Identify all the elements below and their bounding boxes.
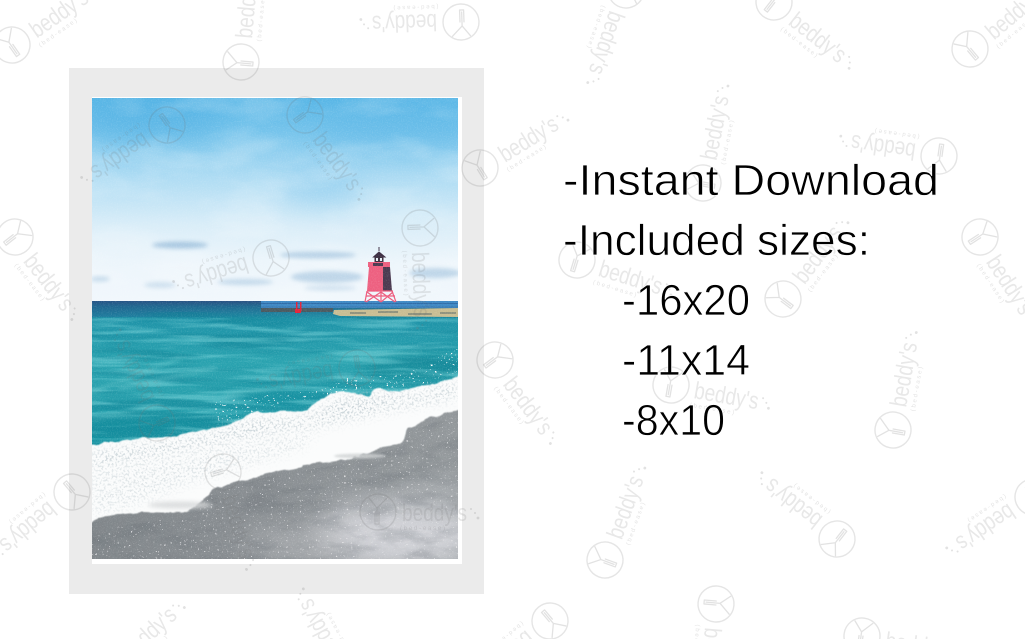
watermarks: beddy's [18,249,79,316]
artwork: lighthouse seascape [92,98,458,559]
watermarks: (bed-ease) [302,141,333,181]
watermarks: (bed-ease) [8,491,46,524]
watermarks: (bed-ease) [506,144,547,173]
water streaks [92,352,420,420]
watermarks: beddy's [406,252,435,317]
watermarks: (bed-ease) [875,127,920,139]
watermarks: (bed-ease) [966,493,1007,523]
watermarks: (bed-ease) [210,497,229,542]
watermarks: (bed-ease) [201,245,246,264]
watermarks: beddy's [692,377,761,415]
watermarks: (bed-ease) [975,263,1005,304]
grey mat panel [69,68,484,594]
watermarks: beddy's [596,256,666,300]
watermarks: beddy's [267,357,335,395]
watermarks: beddy's [696,93,735,162]
breakwater pier [261,301,458,317]
watermarks: beddy's [182,251,252,295]
watermarks: beddy's [951,498,1020,557]
watermarks: beddy's [885,340,923,409]
watermarks: beddy's [216,491,260,561]
watermarks: (bed-ease) [400,526,445,532]
watermarks: (bed-ease) [13,263,45,302]
watermarks: (bed-ease) [779,27,818,59]
watermarks: beddy's [402,500,467,527]
line: instant download: -Instant Download [563,156,939,205]
watermarks: (bed-ease) [911,366,924,412]
watermarks: (bed-ease) [288,352,333,366]
sky [80,98,480,302]
white paper sheet [92,97,462,564]
watermarks: (bed-ease) [492,386,524,426]
size: 16x20: -16x20 [622,276,750,325]
watermarks: beddy's [307,127,367,196]
clouds [90,242,461,290]
product info text block [563,156,939,445]
watermarks: (bed-ease) [721,120,735,165]
watermarks: (bed-ease) [592,280,637,299]
watermarks: (bed-ease) [585,4,606,49]
sand beach [92,409,458,559]
lake water [92,301,458,446]
watermarks: beddy's [784,7,852,69]
watermarks: (bed-ease) [807,254,839,293]
size: 8x10: -8x10 [622,396,725,445]
line: included sizes heading: -Included sizes: [563,216,870,265]
watermarks: (bed-ease) [401,250,408,296]
watermarks: beddy's [109,336,160,406]
watermarks: beddy's [788,221,849,289]
watermarks: beddy's [759,472,827,534]
watermarks: (bed-ease) [689,403,735,416]
paper grain [92,98,458,559]
foam wave [92,345,458,523]
watermarks: beddy's [497,372,558,440]
lighthouse [365,247,396,302]
spray droplets [215,345,458,424]
watermarks: beddy's [583,8,630,78]
watermarks: (bed-ease) [101,121,141,152]
watermarks: (bed-ease) [793,482,832,514]
watermarks: (bed-ease) [38,18,78,49]
size: 11x14: -11x14 [622,336,750,385]
watermarks: beddy's [372,8,437,37]
watermarks: (bed-ease) [141,354,166,397]
watermarks: beddy's [85,126,154,186]
watermarks: (bed-ease) [626,502,647,546]
watermarks: beddy's [494,111,563,168]
watermarks: beddy's [602,472,650,543]
watermarks: beddy's [849,129,917,165]
watermarks: (bed-ease) [393,3,439,10]
